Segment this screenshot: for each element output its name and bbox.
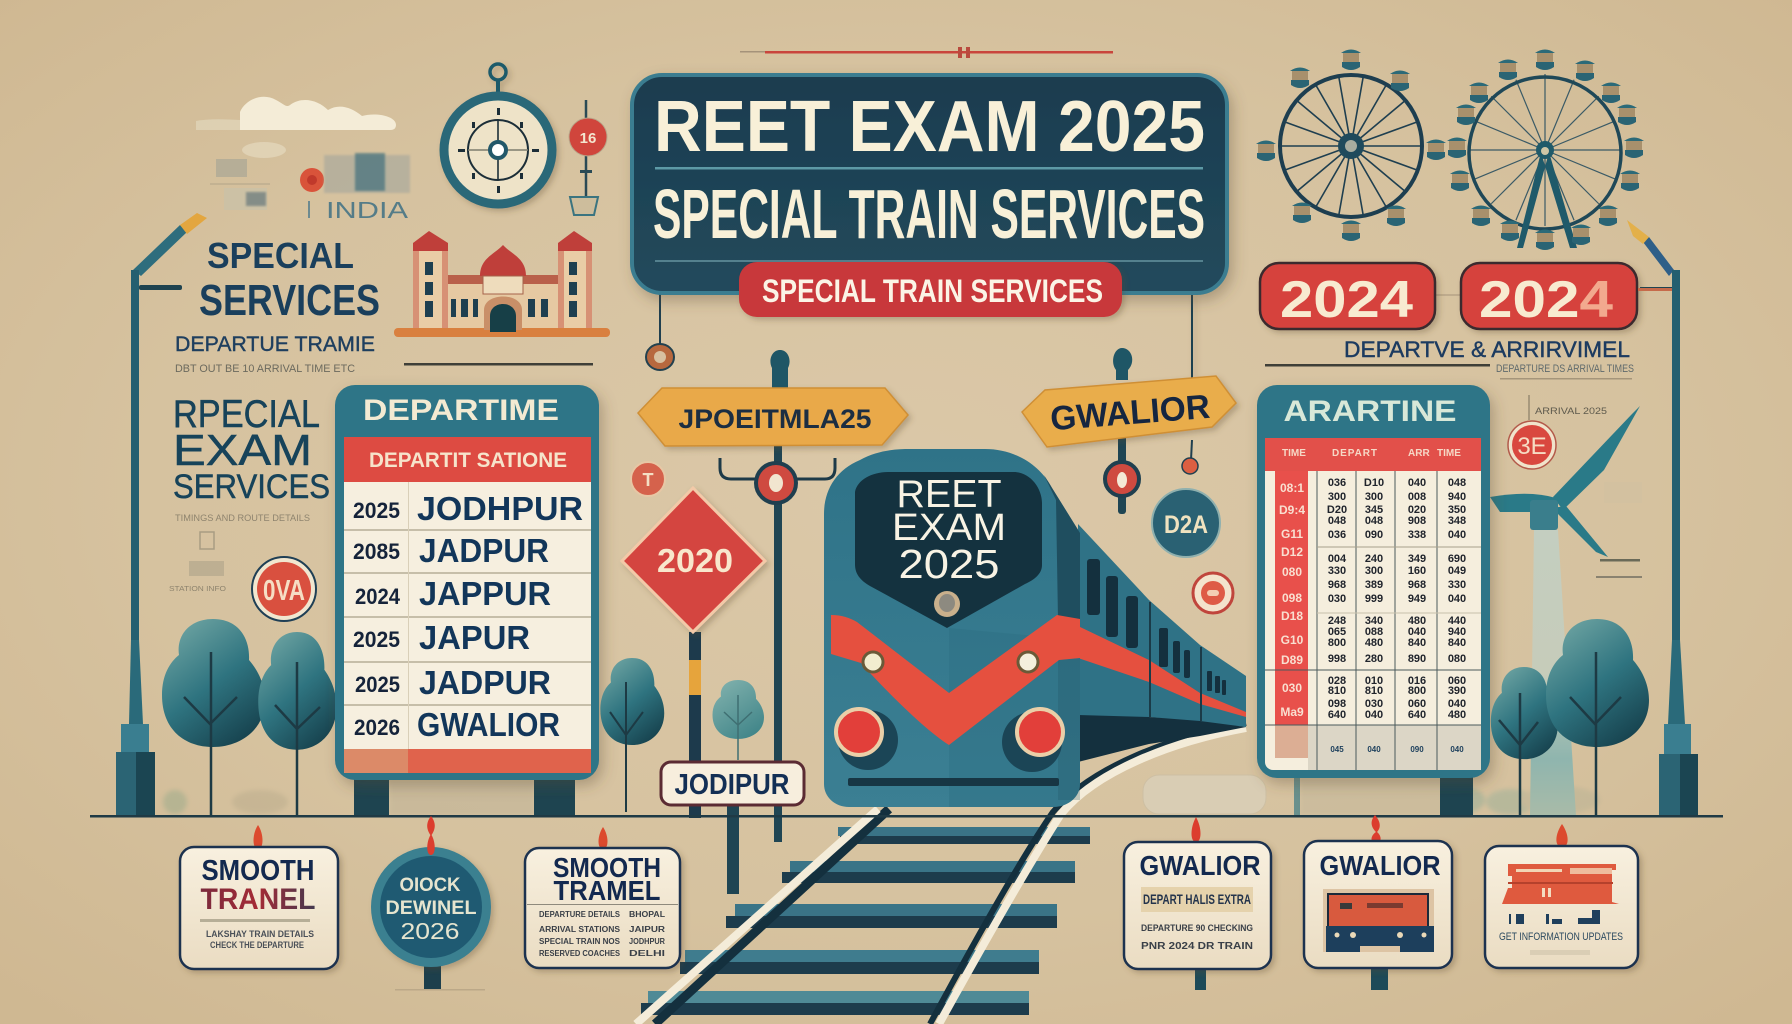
- faded notes: STATION INFO: [169, 586, 227, 593]
- card: Gwalior 1: GWALIOR: [1140, 850, 1260, 881]
- badge: 3E with caption: [1508, 395, 1607, 469]
- icon: red circle T: T: [642, 470, 654, 490]
- timetable left column: D9:4: [1279, 503, 1305, 517]
- card: Gwalior 1: DEPARTURE 90 CHECKING: [1141, 923, 1253, 933]
- train: [824, 449, 1246, 807]
- timetable cells: 040: [1365, 709, 1383, 721]
- rows: JADPUR: [419, 664, 551, 701]
- heading: special exam services: EXAM: [173, 426, 312, 475]
- icon: red circle T: [631, 462, 665, 496]
- card: smooth travel 2: JAIPUR: [629, 925, 665, 934]
- timetable cells: 968: [1328, 579, 1346, 591]
- timetable cells: 940: [1448, 626, 1466, 638]
- timetable cells: 048: [1448, 477, 1466, 489]
- card: smooth travel 2: SPECIAL TRAIN NOS: [539, 937, 621, 946]
- pin: [1192, 817, 1200, 842]
- timetable cells: 908: [1408, 515, 1426, 527]
- timetable cells: 998: [1328, 653, 1346, 665]
- timetable cells: D10: [1364, 477, 1384, 489]
- pin: [427, 816, 435, 855]
- timetable cells: 800: [1328, 637, 1346, 649]
- rows: 2025: [353, 627, 400, 652]
- rows: JADPUR: [419, 532, 549, 569]
- timetable cells: 036: [1328, 529, 1346, 541]
- timetable cells: 060: [1408, 698, 1426, 710]
- timetable headers: ARR: [1408, 448, 1430, 459]
- badge: 2024 first: [1260, 263, 1435, 329]
- card: Gwalior 1: [1124, 817, 1271, 990]
- board frame: [335, 385, 599, 780]
- year badges: [1260, 263, 1672, 329]
- timetable cells: 010: [1365, 675, 1383, 687]
- heading: special services: SERVICES: [199, 276, 380, 325]
- title line 1: REET EXAM 2025: [654, 87, 1205, 167]
- faint distant sign: [1143, 775, 1266, 814]
- badge: 2024 second: [1461, 263, 1637, 329]
- ferris wheel 2: [1447, 50, 1644, 250]
- station sign post + Jodhpur sign: JODIPUR: [674, 769, 790, 801]
- card: smooth travel 2: BHOPAL: [629, 910, 665, 919]
- red station bar: DEPARTIT SATIONE: [369, 449, 567, 472]
- timetable cells: 640: [1328, 709, 1346, 721]
- badge: D2A: D2A: [1164, 511, 1208, 539]
- timetable cells: 810: [1328, 685, 1346, 697]
- subheading: departure and arrival: DEPARTURE DS ARRIVAL TIMES: [1496, 363, 1634, 375]
- timetable left column: 080: [1282, 565, 1302, 579]
- card: smooth travel 1: TRANEL: [200, 883, 316, 916]
- timetable cells: 330: [1448, 579, 1466, 591]
- timetable cells: 280: [1365, 653, 1383, 665]
- timetable cells: 840: [1448, 637, 1466, 649]
- rows: JODHPUR: [417, 490, 583, 527]
- red station bar: [344, 437, 591, 482]
- subheading: departure: DBT OUT BE 10 ARRIVAL TIME ETC: [175, 363, 355, 375]
- card: smooth travel 2: ARRIVAL STATIONS: [539, 925, 621, 934]
- timetable left column: D12: [1281, 545, 1303, 559]
- timetable headers: TIME: [1437, 448, 1461, 459]
- timetable cells: 049: [1448, 565, 1466, 577]
- timetable cells: 350: [1448, 504, 1466, 516]
- heading: special exam services: [173, 393, 330, 506]
- timetable left column: 098: [1282, 591, 1302, 605]
- card: Gwalior 1: DEPART HALIS EXTRA: [1143, 891, 1251, 907]
- red chevron stripe: [831, 615, 1080, 745]
- train destination text: 2025: [898, 541, 1000, 587]
- card: smooth travel 1: SMOOTH: [202, 855, 314, 887]
- direction sign: left: JPOEITMLA25: [678, 404, 872, 434]
- faded India landmark: [210, 142, 410, 223]
- board header: ARARTINE: [1284, 395, 1456, 428]
- timetable cells: 016: [1408, 675, 1426, 687]
- heading: special exam services: SERVICES: [173, 468, 330, 506]
- badge: 3E with caption: ARRIVAL 2025: [1535, 406, 1607, 416]
- timetable footer: [1330, 745, 1464, 754]
- rows: 2085: [353, 539, 400, 564]
- icon: small red signal: [569, 100, 607, 215]
- badge: clock deadline 2026: DEWINEL: [386, 898, 477, 919]
- ferris wheel 1: [1256, 50, 1446, 241]
- rows: [344, 482, 591, 749]
- timetable cells: 040: [1448, 698, 1466, 710]
- subheading: departure: DEPARTUE TRAMIE: [175, 333, 375, 356]
- left rail: [636, 809, 889, 1024]
- tree behind junction: [600, 658, 664, 812]
- small lights: [863, 652, 1038, 672]
- cloud: [196, 97, 396, 130]
- right rail: [930, 723, 1246, 1024]
- badge: 0VA: 0VA: [263, 575, 305, 607]
- timetable footer: 045: [1330, 745, 1344, 754]
- card: Gwalior 2 with train image: [1304, 815, 1452, 990]
- top headlamp: [934, 591, 960, 617]
- card: smooth travel 2: [525, 827, 680, 968]
- train destination text: EXAM: [892, 507, 1006, 549]
- card: smooth travel 2: DELHI: [629, 949, 665, 958]
- timetable cells: 345: [1365, 504, 1383, 516]
- top red rule: [740, 47, 1113, 58]
- timetable cells: 240: [1365, 553, 1383, 565]
- timetable cells: 999: [1365, 593, 1383, 605]
- timetable cells: 330: [1328, 565, 1346, 577]
- warning diamond sign 2020: 2020: [657, 542, 733, 579]
- timetable left column: D18: [1281, 609, 1303, 623]
- badge: D2A: [1152, 489, 1220, 557]
- icon: small red signal: 16: [580, 130, 596, 147]
- board legs: [354, 778, 575, 816]
- timetable cells: 348: [1448, 515, 1466, 527]
- timetable left column: 030: [1282, 681, 1302, 695]
- timetable cells: 480: [1408, 615, 1426, 627]
- timetable cells: 690: [1448, 553, 1466, 565]
- hanging title ornaments: [646, 293, 674, 370]
- timetable cells: 030: [1365, 698, 1383, 710]
- train image: [1323, 889, 1434, 952]
- card: Gwalior 1: PNR 2024 DR TRAIN: [1141, 941, 1253, 952]
- timetable cells: 800: [1408, 685, 1426, 697]
- label: India: INDIA: [326, 197, 409, 223]
- railway track: [636, 723, 1246, 1024]
- timetable cells: 028: [1328, 675, 1346, 687]
- sleepers: [641, 827, 1090, 1015]
- faded notes: [169, 513, 310, 593]
- timetable cells: 640: [1408, 709, 1426, 721]
- badge: 2024 second: 202 4: [1479, 271, 1613, 329]
- badge: clock deadline 2026: 2026: [400, 918, 460, 944]
- timetable cells: 480: [1448, 709, 1466, 721]
- card: smooth travel 1: CHECK THE DEPARTURE: [210, 940, 304, 950]
- ground line: [90, 815, 1723, 818]
- direction sign: left: [638, 388, 908, 446]
- right lamp post: [1627, 220, 1698, 816]
- timetable cells: 040: [1448, 529, 1466, 541]
- red ticket image: [1502, 864, 1619, 904]
- light tree: [712, 680, 764, 760]
- departure board: [335, 385, 599, 816]
- trees left: [162, 619, 337, 815]
- left lamp post: [116, 213, 207, 816]
- direction sign: Gwalior: GWALIOR: [1049, 388, 1211, 438]
- heading: special services: [199, 235, 380, 325]
- board legs: [1294, 776, 1473, 816]
- timetable cells: 065: [1328, 626, 1346, 638]
- timetable left column: 08:1: [1280, 481, 1304, 495]
- timetable cells: 390: [1448, 685, 1466, 697]
- badge: 0VA: [252, 557, 316, 621]
- timetable cells: 349: [1408, 553, 1426, 565]
- warning diamond sign 2020: [622, 488, 765, 818]
- card: smooth travel 1: LAKSHAY TRAIN DETAILS: [206, 929, 314, 939]
- timetable cells: 060: [1448, 675, 1466, 687]
- timetable left column: Ma9: [1280, 705, 1304, 719]
- rows: JAPUR: [419, 619, 530, 656]
- heading: special services: SPECIAL: [207, 235, 354, 276]
- timetable cells: 036: [1328, 477, 1346, 489]
- title panel: [632, 75, 1227, 317]
- timetable cells: 480: [1365, 637, 1383, 649]
- timetable cells: [1327, 477, 1466, 721]
- pin: [598, 827, 608, 849]
- title line 2: SPECIAL TRAIN SERVICES: [653, 175, 1205, 253]
- timetable cells: 030: [1328, 593, 1346, 605]
- badge: clock deadline 2026: OIOCK: [400, 875, 461, 896]
- timetable cells: 338: [1408, 529, 1426, 541]
- timetable cells: 300: [1328, 491, 1346, 503]
- timetable cells: 080: [1448, 653, 1466, 665]
- timetable cells: 300: [1365, 565, 1383, 577]
- bottom grille: [848, 778, 1059, 786]
- rows: 2024: [355, 584, 401, 609]
- timetable cells: 340: [1365, 615, 1383, 627]
- timetable cells: 040: [1408, 626, 1426, 638]
- timetable cells: 968: [1408, 579, 1426, 591]
- rows: JAPPUR: [419, 575, 551, 612]
- red footer strip: [344, 749, 591, 773]
- trees right: [1491, 619, 1649, 815]
- badge: clock deadline 2026: [371, 816, 491, 990]
- timetable cells: 020: [1408, 504, 1426, 516]
- direction sign: Gwalior: [1022, 293, 1236, 447]
- timetable body: [1265, 438, 1481, 770]
- train front: [824, 449, 1080, 807]
- timetable cells: 300: [1365, 491, 1383, 503]
- timetable cells: 040: [1448, 593, 1466, 605]
- red subtitle badge: [739, 262, 1122, 317]
- timetable cells: 090: [1365, 529, 1383, 541]
- arrival board: [1257, 385, 1490, 816]
- timetable cells: 048: [1365, 515, 1383, 527]
- timetable cells: D20: [1327, 504, 1347, 516]
- badge: 3E with caption: 3E: [1517, 433, 1547, 460]
- timetable cells: 160: [1408, 565, 1426, 577]
- timetable headers: DEPART: [1332, 448, 1377, 459]
- pin: [254, 825, 262, 849]
- subheading: departure and arrival: DEPARTVE & ARRIRVIMEL: [1344, 337, 1630, 362]
- timetable left column: [1279, 481, 1305, 719]
- timetable cells: 008: [1408, 491, 1426, 503]
- board frame: [1257, 385, 1490, 778]
- windshield: [855, 472, 1042, 628]
- timetable left column: D89: [1281, 653, 1303, 667]
- heading: special exam services: RPECIAL: [173, 393, 320, 436]
- timetable cells: 940: [1448, 491, 1466, 503]
- card: smooth travel 2: TRAMEL: [554, 875, 660, 906]
- timetable cells: 840: [1408, 637, 1426, 649]
- timetable footer: 040: [1367, 745, 1381, 754]
- card: smooth travel 1: [180, 825, 338, 969]
- subheading: departure: [175, 333, 593, 375]
- rows: 2026: [354, 715, 400, 740]
- card: smooth travel 2: RESERVED COACHES: [539, 949, 621, 958]
- badge: 2024 first: 2024: [1280, 271, 1413, 329]
- station sign post + Jodhpur sign: [661, 762, 804, 894]
- red subtitle badge: SPECIAL TRAIN SERVICES: [762, 273, 1103, 309]
- timetable left column: G10: [1281, 633, 1304, 647]
- timetable footer: 040: [1450, 745, 1464, 754]
- signal post left: [720, 350, 835, 842]
- timetable cells: 098: [1328, 698, 1346, 710]
- badge: small red lamp: [1193, 573, 1233, 613]
- card: ticket info: [1485, 824, 1638, 968]
- timetable cells: 389: [1365, 579, 1383, 591]
- timetable cells: 248: [1328, 615, 1346, 627]
- card: ticket info: GET INFORMATION UPDATES: [1499, 931, 1623, 943]
- rows: GWALIOR: [417, 706, 560, 743]
- timetable headers: TIME: [1282, 448, 1306, 459]
- rows: 2025: [355, 672, 400, 697]
- timetable cells: 048: [1328, 515, 1346, 527]
- timetable cells: 004: [1328, 553, 1347, 565]
- subheading: departure and arrival: [1265, 337, 1634, 380]
- faded ground shrubs: [163, 778, 1600, 816]
- pin: [1372, 815, 1381, 843]
- timetable cells: 040: [1408, 477, 1426, 489]
- timetable cells: 810: [1365, 685, 1383, 697]
- icon: railway station: [394, 231, 610, 337]
- train destination text: [892, 473, 1006, 587]
- wind turbine: [1490, 406, 1642, 816]
- train destination text: REET: [896, 473, 1002, 516]
- card: smooth travel 2: SMOOTH: [553, 852, 661, 883]
- timetable cells: 440: [1448, 615, 1466, 627]
- signal post right: [1105, 348, 1198, 514]
- timetable headers: [1282, 448, 1461, 459]
- icon: pocket clock: [444, 64, 552, 204]
- board header: DEPARTIME: [363, 394, 559, 427]
- train side: [1078, 524, 1246, 762]
- timetable footer: 090: [1410, 745, 1424, 754]
- card: smooth travel 2: DEPARTURE DETAILS: [539, 910, 621, 919]
- rows: 2025: [353, 498, 400, 523]
- faded notes: TIMINGS AND ROUTE DETAILS: [175, 513, 310, 523]
- buffers: [836, 709, 1063, 772]
- card: Gwalior 2 with train image: GWALIOR: [1320, 850, 1440, 881]
- timetable cells: 088: [1365, 626, 1383, 638]
- pin: [1556, 824, 1568, 847]
- timetable left column: G11: [1281, 527, 1303, 541]
- timetable cells: 890: [1408, 653, 1426, 665]
- timetable cells: 949: [1408, 593, 1426, 605]
- card: smooth travel 2: JODHPUR: [629, 937, 665, 946]
